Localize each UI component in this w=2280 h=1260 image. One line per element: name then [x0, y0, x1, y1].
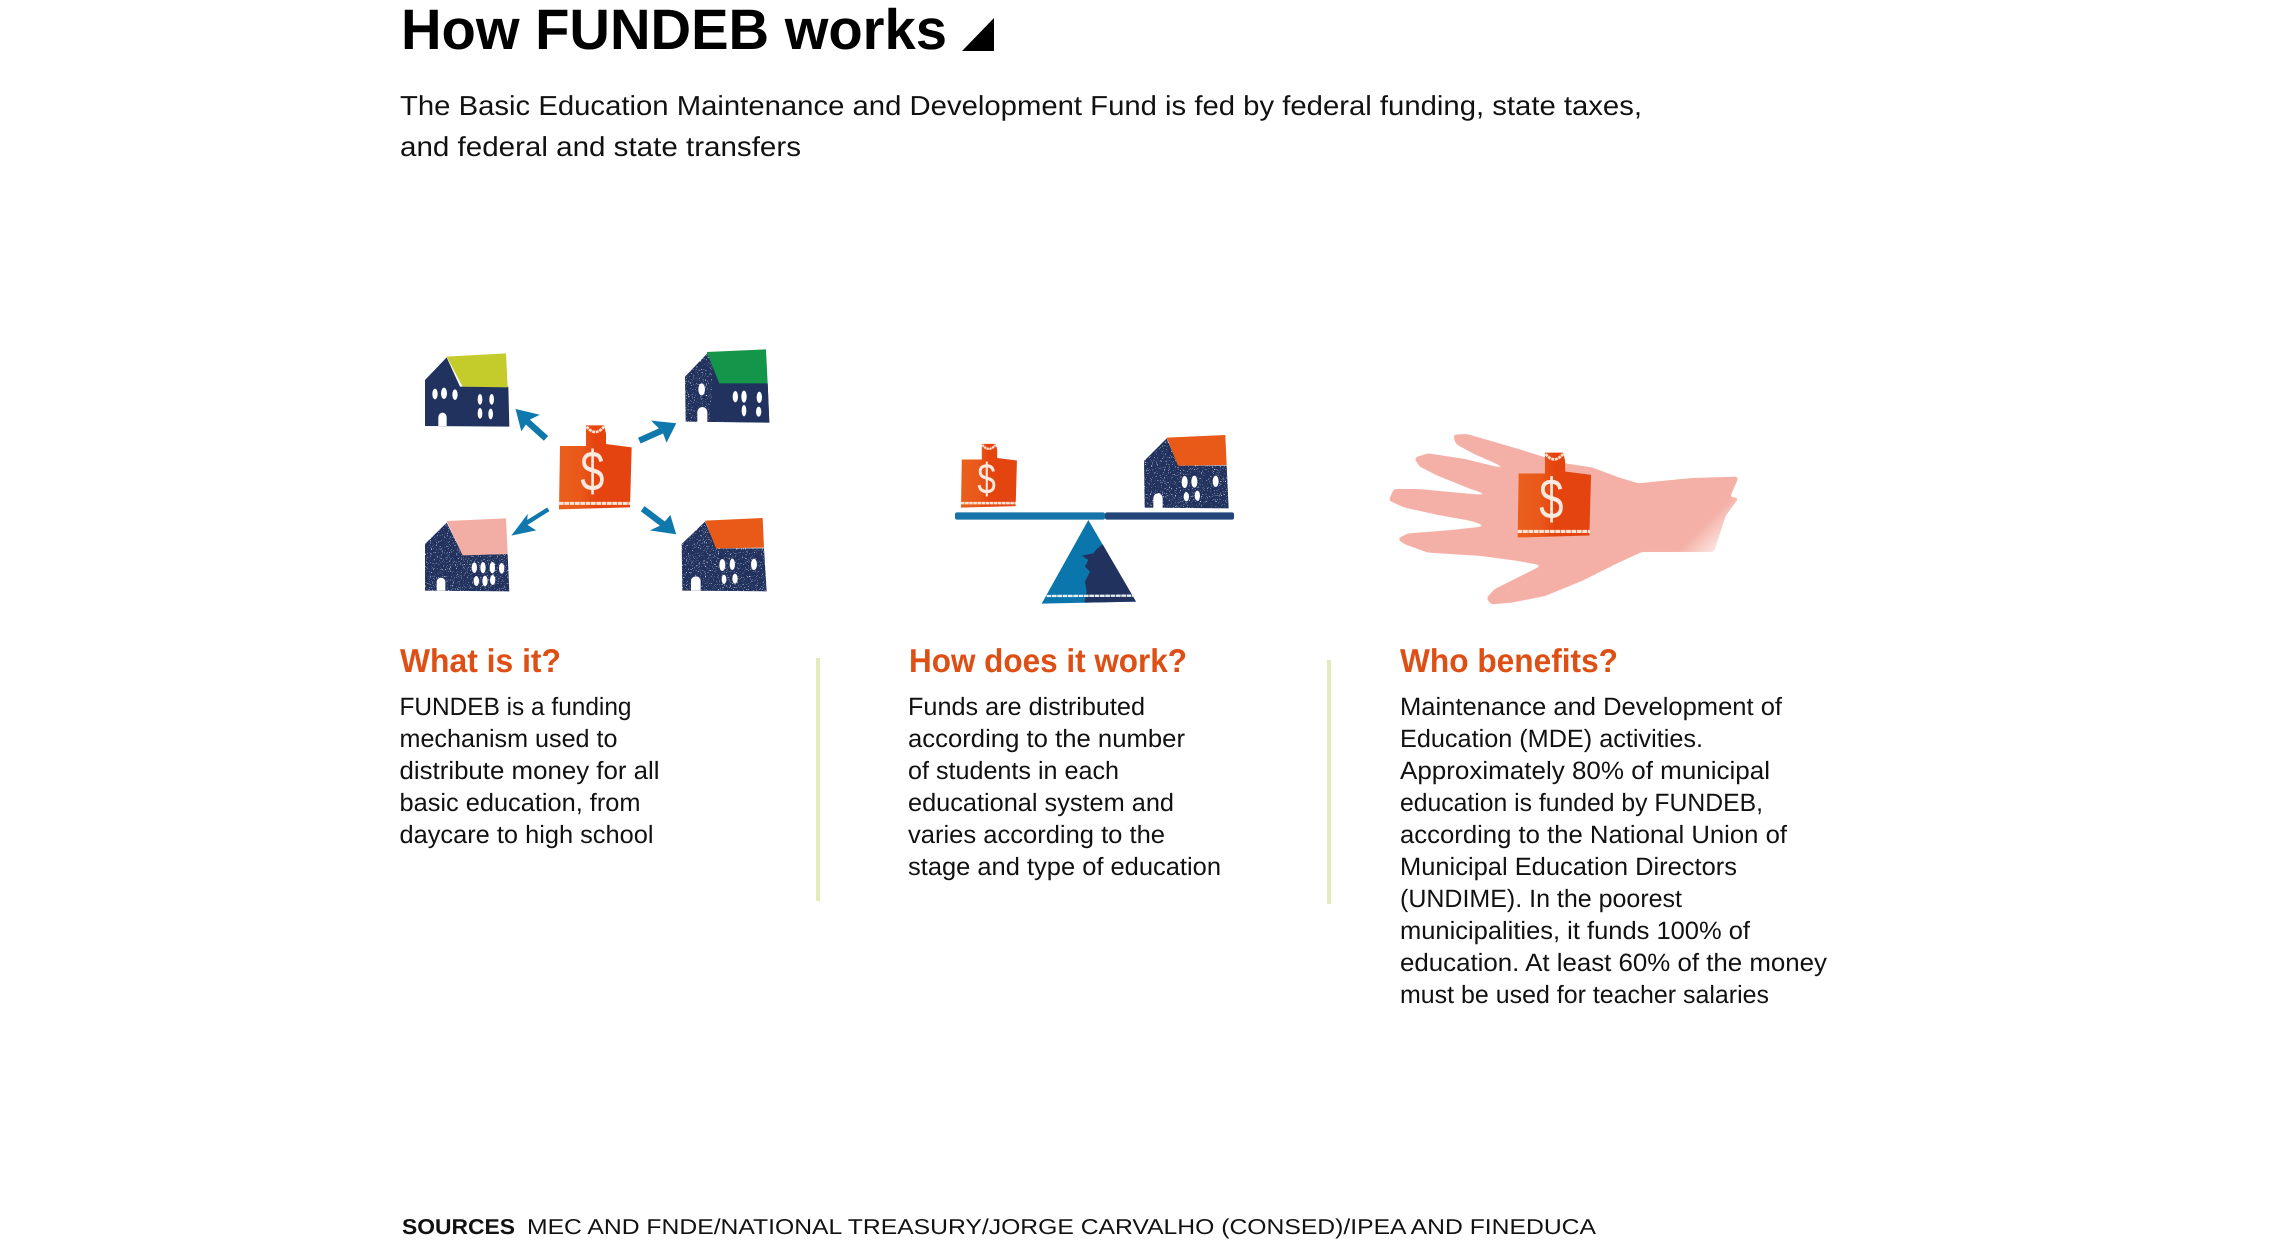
icon: school with orange roof — [682, 518, 767, 591]
subtitle: The Basic Education Maintenance and Development Fund is fed by federal funding, state taxes, — [400, 90, 1642, 121]
heading: who benefits: Who benefits? — [1400, 642, 1618, 679]
text block: who benefits — [1400, 693, 1828, 1009]
text block: who benefits: (UNDIME). In the poorest — [1400, 885, 1682, 913]
panel: what is it — [400, 642, 660, 849]
icon: money bag on hand — [1518, 453, 1591, 537]
text block: who benefits: education is funded by FUNDEB, — [1400, 789, 1763, 817]
text block: who benefits: municipalities, it funds 100% of — [1400, 917, 1750, 945]
text block: who benefits: Maintenance and Development of — [1400, 693, 1782, 721]
illustration: hand holding money bag — [1390, 435, 1743, 603]
text block: what is it: FUNDEB is a funding — [400, 693, 632, 721]
arrow: to bottom-left school — [513, 509, 548, 534]
illustration: money bag distributed to four schools — [425, 349, 769, 591]
text block: how does it work: Funds are distributed — [908, 693, 1145, 721]
text block: how does it work: of students in each — [908, 757, 1119, 785]
subtitle — [400, 90, 1642, 162]
icon: money bag: $ — [580, 440, 604, 503]
icon: money bag on scale — [961, 444, 1017, 508]
text block: how does it work — [908, 693, 1221, 881]
icon: money bag — [559, 425, 632, 509]
panel: how does it work — [908, 642, 1221, 881]
text block: how does it work: educational system and — [908, 789, 1174, 817]
arrow: to bottom-right school — [643, 509, 675, 533]
scale fulcrum — [1042, 520, 1136, 604]
illustration: balance scale with money bag and school — [955, 435, 1234, 604]
text block: who benefits: education. At least 60% of the money — [1400, 949, 1828, 977]
arrow: to top-right school — [639, 422, 675, 441]
text block: how does it work: stage and type of education — [908, 853, 1221, 881]
icon: hand — [1390, 435, 1743, 603]
icon: money bag on hand: $ — [1539, 467, 1563, 531]
sources footer: MEC AND FNDE/NATIONAL TREASURY/JORGE CARVALHO (CONSED)/IPEA AND FINEDUCA — [527, 1215, 1597, 1239]
text block: what is it: distribute money for all — [400, 757, 660, 785]
text block: who benefits: according to the National Union of — [1400, 821, 1787, 849]
scale beam — [955, 512, 1234, 520]
text block: who benefits: must be used for teacher salaries — [1400, 981, 1769, 1009]
text block: what is it: daycare to high school — [400, 821, 654, 849]
text block: what is it: mechanism used to — [400, 725, 618, 753]
icon: school on scale — [1144, 435, 1229, 508]
text block: what is it — [400, 693, 660, 849]
text block: who benefits: Education (MDE) activities. — [1400, 725, 1703, 753]
heading: how does it work: How does it work? — [909, 642, 1187, 679]
text block: who benefits: Approximately 80% of municipal — [1400, 757, 1770, 785]
text block: how does it work: according to the number — [908, 725, 1185, 753]
icon: money bag on scale: $ — [977, 455, 996, 503]
icon: school with lime roof — [425, 353, 509, 427]
arrow: to top-left school — [517, 410, 546, 438]
sources footer: SOURCES — [402, 1215, 515, 1239]
panel: who benefits — [1400, 642, 1828, 1009]
text block: what is it: basic education, from — [400, 789, 640, 817]
icon: school with pink roof — [425, 518, 509, 591]
heading: what is it: What is it? — [400, 642, 561, 679]
icon: school with green roof — [685, 349, 769, 423]
text block: how does it work: varies according to the — [908, 821, 1165, 849]
text block: who benefits: Municipal Education Directors — [1400, 853, 1737, 881]
subtitle: and federal and state transfers — [400, 131, 801, 162]
